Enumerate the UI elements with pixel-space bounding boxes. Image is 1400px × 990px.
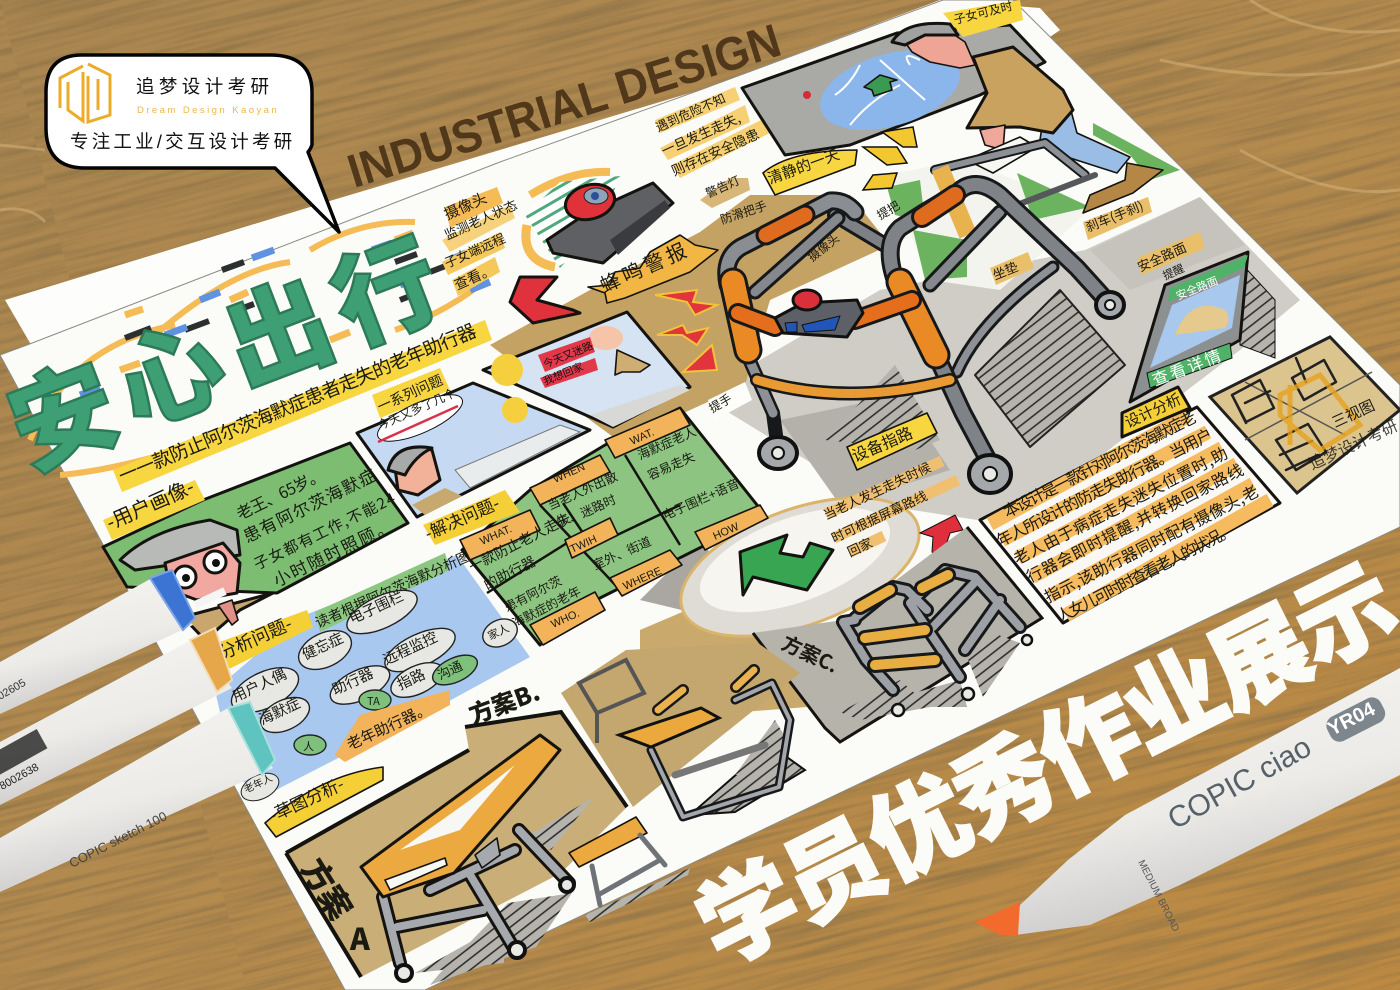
label: guidance note [820, 413, 958, 561]
panel: 5W grid [420, 408, 768, 645]
marker pen: teal copic sketch: COPIC sketch 100 [67, 808, 169, 871]
panel: user portrait: 患有阿尔茨海默症 [238, 461, 380, 547]
panel: 5W grid: 的助行器 [481, 553, 538, 593]
panel: analysis mind map: 健忘症 [300, 630, 346, 664]
panel: analysis mind map: 老年人 [241, 769, 274, 796]
panel: 5W grid: WHAT. [478, 523, 514, 548]
panel: analysis mind map: 海默症 [257, 695, 303, 729]
chart: main walker illustration [727, 184, 1125, 493]
sketch: option A: A [349, 915, 371, 959]
panel: 5W grid: -解决问题- [420, 489, 503, 545]
icon: camera projector [440, 172, 673, 296]
panel: 5W grid: 海默症老人 [635, 423, 699, 463]
panel: 5W grid: TWIH [568, 533, 599, 556]
panel: analysis mind map: 沟通 [434, 655, 465, 684]
panel: design analysis: 年人所设计的防走失助行器。当用户 [991, 421, 1216, 551]
panel: series of problems: 一系列问题 [374, 370, 446, 417]
sketch: option A: -草图分析- [265, 770, 348, 827]
icon: logo [60, 64, 110, 122]
panel: 5W grid: WHO. [549, 608, 582, 631]
sketch: option A [265, 712, 690, 985]
speech bubble: logo and slogan: Dream Design Kaoyan [137, 105, 279, 116]
panel: 5W grid: 一款防止老人走失 [466, 510, 573, 575]
label: guidance note: 时可根据屏幕路线 [828, 485, 930, 547]
title banner: product tagline: 一一款防止阿尔茨海默症患者走失的老年助行器 [114, 316, 480, 489]
panel: user portrait: 小时随时照顾。 [268, 512, 396, 591]
panel: old man with speech bubbles [483, 312, 690, 427]
panel: design analysis: 行器会即时提醒,并转换回家路线 [1021, 457, 1247, 587]
label: guidance note: 当老人发生走失时候 [820, 457, 934, 524]
panel: three views [1210, 337, 1400, 493]
labels: walker parts: 安全路面 [1134, 237, 1189, 276]
engraved heading: INDUSTRIAL DESIGN: INDUSTRIAL DESIGN [341, 13, 787, 198]
shadow hatching [825, 290, 1125, 450]
panel: 5W grid: 容易走失 [645, 448, 697, 483]
sketch: option A: 方案 [292, 849, 364, 928]
panel: 5W grid: HOW [711, 521, 741, 543]
panel: three views: 追梦设计考研 [1304, 412, 1400, 475]
sketch: option B: 方案B. [463, 673, 544, 731]
panel: user portrait: 子女都有工作,不能24 [250, 488, 399, 574]
sketch: option B [463, 643, 805, 817]
icon: camera projector: 摄像头 [440, 187, 490, 225]
panel: old man with speech bubbles: 我想回家 [541, 360, 586, 388]
panel: 5W grid: 电子围栏+语音 [660, 476, 741, 523]
panel: 5W grid: WHERE [621, 565, 664, 593]
panel: analysis mind map: 指路 [395, 666, 428, 694]
panel: user portrait: 老王、65岁。 [232, 461, 328, 524]
icon: elderly man in window [388, 447, 462, 515]
panel: analysis mind map: 分析问题- [214, 610, 296, 665]
panel: phone interface: 查看详情 [1150, 347, 1224, 390]
labels: walker parts: 刹车(手刹) [1082, 195, 1146, 236]
labels: walker parts: 摄像头 [804, 230, 843, 265]
labels: walker parts: 提把 [874, 197, 903, 223]
panel: design analysis: 人女儿可时时查看老人的状况。 [1051, 517, 1238, 627]
labels: walker parts: 防滑把手 [718, 197, 769, 228]
panel: analysis mind map: 读者根据阿尔茨海默分析图 [312, 546, 474, 633]
icon: camera projector: 子女端远程 [441, 228, 508, 272]
label: buzzer alarm with lightning: 蜂鸣警报 [595, 235, 690, 298]
panel: series of problems [357, 368, 590, 517]
panel: analysis mind map [214, 546, 530, 806]
panel: 5W grid: 室外、街道 [590, 533, 654, 573]
marker pen: teal copic sketch [0, 702, 275, 892]
label: buzzer alarm with lightning [588, 235, 718, 372]
labels: walker parts: 提醒 [1160, 260, 1187, 284]
speech bubble: logo and slogan: 专注工业/交互设计考研 [70, 131, 295, 152]
labels: walker parts: 坐垫 [989, 256, 1021, 284]
panel: analysis mind map: 电子围栏 [347, 588, 406, 628]
text block: top note: 遇到危险不知 [652, 88, 728, 136]
panel: user portrait: -用户画像- [101, 471, 198, 535]
panel: series of problems: 今天又多了几个 [375, 384, 458, 434]
labels: walker parts: 提手 [706, 390, 735, 416]
panel: analysis mind map: 老年助行器。 [343, 697, 434, 755]
panel: design analysis: 本设计是一款针对阿尔茨海默症老 [998, 404, 1200, 522]
illustration: elderly man walking with walker [887, 0, 1180, 280]
panel: analysis mind map: 远程监控 [381, 629, 440, 669]
speech bubble: logo and slogan: 追梦设计考研 [136, 76, 273, 97]
panel: analysis mind map: 人 [303, 738, 314, 754]
washes: grey floor and tan backdrops [490, 160, 1300, 720]
icon: yellow lightning [863, 127, 917, 190]
panel: 5W grid: WAT. [628, 427, 656, 448]
panel: phone interface: 安全路面 [1174, 273, 1220, 303]
panel: design analysis: 设计分析 [1121, 388, 1185, 433]
illustration: map panel with home arrow [742, 25, 1045, 155]
panel: design analysis: 老人由于病症走失迷失位置时,助 [1008, 440, 1231, 569]
panel: three views: 三视图 [1328, 394, 1378, 433]
icon: camera projector: 监测老人状态 [441, 195, 520, 244]
icon: camera projector: 查看。 [451, 259, 497, 295]
panel: analysis mind map: TA [367, 693, 380, 709]
panel: design analysis [980, 387, 1280, 627]
label: guidance note: 回家 [844, 532, 875, 561]
text block: top note: 则存在安全隐患 [667, 123, 762, 180]
text block: top note: 警告灯 [703, 171, 743, 202]
panel: analysis mind map: 用户人偶 [230, 666, 289, 706]
panel: design analysis: 指示,该助行器同时配有摄像头,老 [1039, 478, 1262, 607]
panel: 5W grid: WHEN [551, 461, 587, 486]
large white heading: 学员优秀作业展示: 学员优秀作业展示 [670, 524, 1400, 990]
marker pen: Copic ciao YR04: YR04 [1324, 698, 1380, 740]
panel: 5W grid: 患有阿尔茨 [502, 573, 564, 615]
panel: 5W grid: 海默症的老年 [510, 583, 583, 631]
panel: 5W grid: 当老人外出散 [545, 468, 620, 513]
panel: analysis mind map: 家人 [485, 621, 511, 643]
label: guidance note: 设备指路 [848, 419, 916, 467]
icon: disc with green and red arrows [663, 470, 963, 664]
marker pen: orange [0, 628, 232, 805]
large title: 安心出行: 安心出行 [0, 222, 456, 491]
panel: phone interface [1130, 252, 1275, 402]
back paper sheet [5, 0, 1060, 560]
speech bubble: logo and slogan [46, 55, 339, 232]
text block: top note: 一旦发生走失, [657, 107, 743, 160]
panel: old man with speech bubbles: 今天又迷路 [541, 339, 595, 371]
panel: 5W grid: 步、迷路时 [555, 491, 619, 531]
labels: walker parts [706, 195, 1205, 420]
text block: top note [652, 87, 857, 208]
marker pen: Copic ciao YR04 [975, 668, 1400, 935]
sketch: option C: 方案C. [777, 627, 844, 679]
marker pen: Copic ciao YR04: COPIC ciao [1162, 730, 1317, 836]
panel: user portrait [101, 443, 408, 640]
sketch: option C [753, 527, 1042, 742]
marker pen: Copic ciao YR04: MEDIUM BROAD [1135, 858, 1181, 934]
panel: analysis mind map: 助行器 [330, 665, 377, 699]
marker pen: blue [0, 570, 195, 714]
icon: old man portrait [120, 520, 273, 640]
text block: top note: 清静的一天 [765, 143, 842, 189]
icon: red curved arrow [510, 277, 580, 323]
